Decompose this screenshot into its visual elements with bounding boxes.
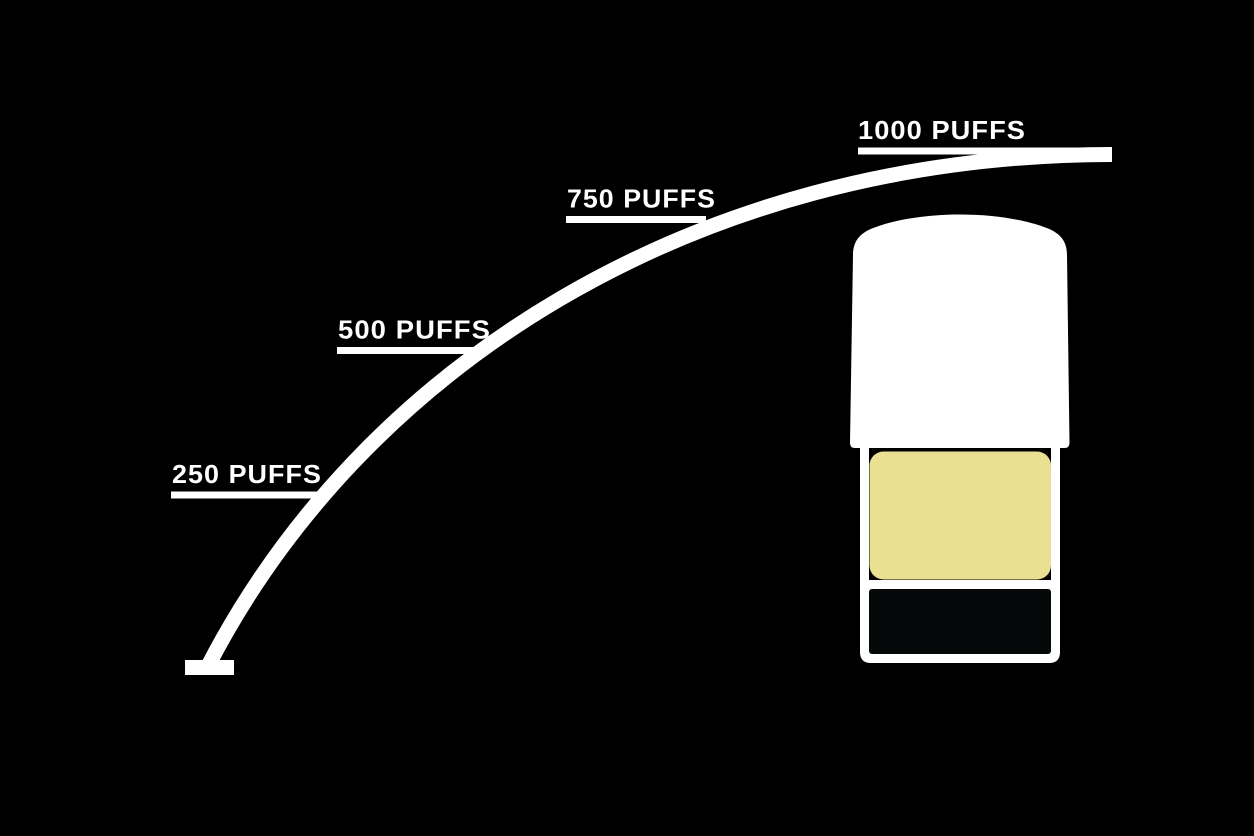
pod upper chamber [869,446,1051,580]
milestone: 1000 puffs [858,117,1112,154]
milestone: 250 puffs: 250 PUFFS [172,461,322,489]
liquid reservoir [870,452,1051,580]
pod lower chamber [869,589,1051,654]
milestone: 750 puffs: 750 PUFFS [567,186,716,214]
icon: vape pod [850,214,1070,663]
milestone: 500 puffs: 500 PUFFS [338,316,491,344]
pod body outline [860,440,1060,663]
curve: puff progression arc [185,154,1112,675]
milestone: 500 puffs [337,316,491,354]
milestone: 1000 puffs: 1000 PUFFS [858,117,1026,145]
pod cap [850,214,1070,448]
milestone: 250 puffs [171,461,325,498]
